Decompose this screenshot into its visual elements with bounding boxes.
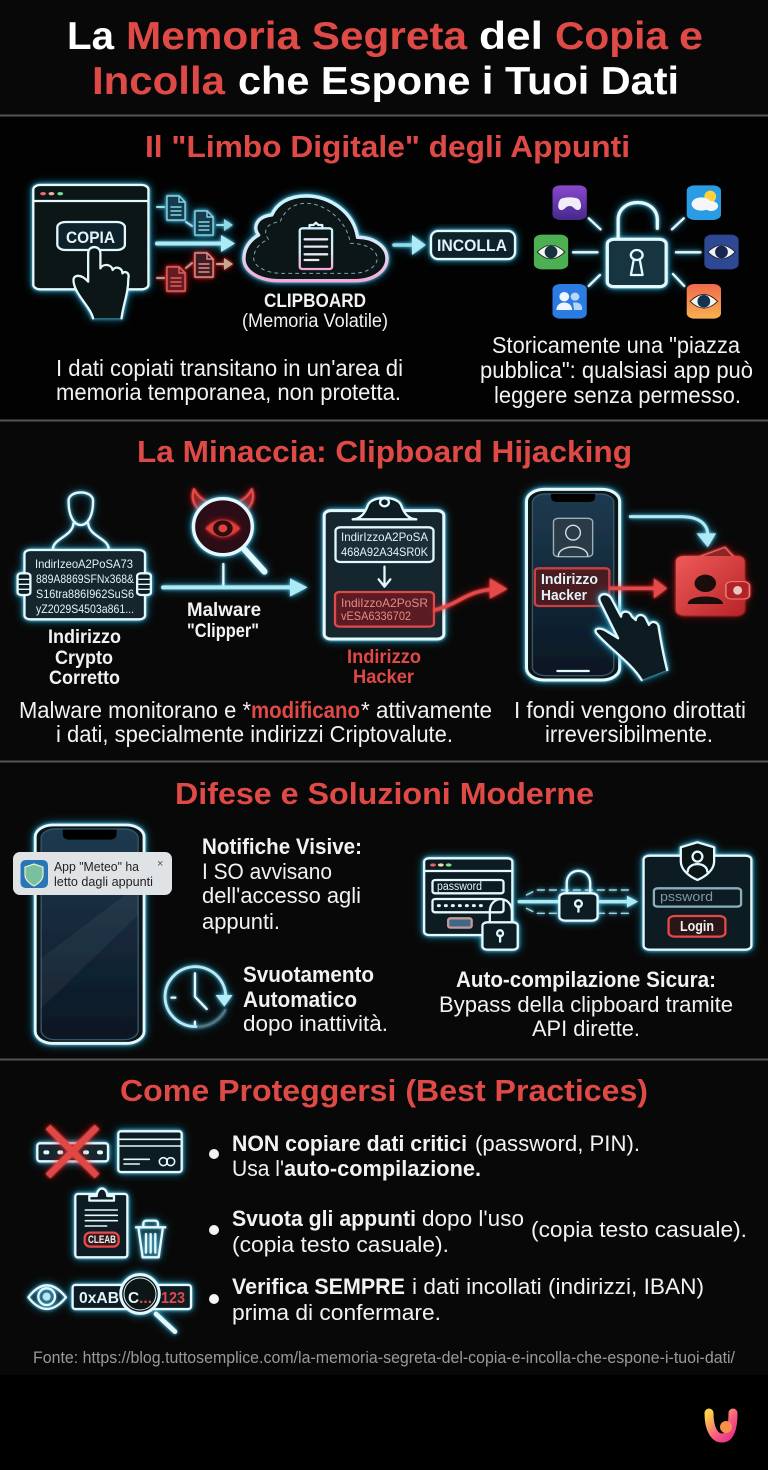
text: visual notifications: [202, 834, 362, 934]
label: correct address: Crypto: [55, 648, 113, 669]
icon: person holding address: yZ2029S4503a861...: [36, 602, 134, 616]
text: secure autofill: API dirette.: [532, 1016, 640, 1041]
source line: Fonte: https://blog.tuttosemplice.com/la-memoria-segreta-del-copia-e-incolla-che-espone-i-tuoi-dati/: [33, 1348, 735, 1367]
icon: copy window with hand: [33, 185, 148, 318]
arrow: phone to wallet cyan: [630, 517, 716, 547]
text: visual notifications: dell'accesso agli: [202, 883, 361, 908]
icon: padlock: [573, 202, 700, 287]
icon: phone with notification: [13, 825, 172, 1043]
text: automatic clearing: Svuotamento: [243, 962, 374, 987]
title: che Espone i Tuoi Dati: [238, 60, 679, 103]
title: e: [679, 15, 703, 58]
icon: phone: [35, 825, 144, 1043]
bullet: clear clipboard: (copia testo casuale).: [232, 1232, 449, 1257]
heading: difese: Difese e Soluzioni Moderne: [175, 776, 594, 811]
arrow: copy to clipboard: [157, 235, 235, 252]
text: temporary memory: I dati copiati transitano in un'area di: [56, 355, 403, 381]
icon: crossed password and card: [37, 1131, 182, 1172]
icon: copy window with hand: COPIA: [66, 228, 115, 247]
title: Memoria Segreta: [126, 15, 467, 58]
bullet: no critical data: Usa l': [232, 1156, 284, 1181]
icon: eye and magnified address: C...: [128, 1290, 152, 1307]
text: automatic clearing: dopo inattività.: [243, 1011, 388, 1036]
icon: tapping hand: [595, 594, 667, 680]
callout: notification: ×: [157, 858, 163, 870]
icon: phone with hacker address: Indirizzo: [541, 571, 598, 588]
icon: eye and magnified address: 123: [161, 1290, 185, 1307]
icon: red documents flowing: [157, 253, 233, 291]
icon: login panel: [644, 842, 751, 950]
icon: red cross: [48, 1127, 97, 1176]
panel: limbo digitale: [33, 129, 753, 408]
arrow: phone to wallet red: [611, 578, 667, 598]
label: incolla button: [431, 231, 515, 259]
text: visual notifications: appunti.: [202, 909, 280, 934]
label: malware clipper: [187, 600, 261, 642]
label: malware clipper: "Clipper": [187, 621, 259, 642]
bullet: always verify: Verifica SEMPRE: [232, 1274, 405, 1299]
label: clipboard: CLIPBOARD: [264, 291, 366, 312]
text: irreversible funds: irreversibilmente.: [545, 721, 713, 747]
text: automatic clearing: [243, 962, 388, 1036]
bullet: clear clipboard: [209, 1206, 747, 1257]
text: visual notifications: Notifiche Visive:: [202, 834, 362, 859]
icon: malware magnifier with horns: [193, 489, 264, 572]
callout: notification: letto dagli appunti: [54, 874, 153, 889]
heading: best practices: Come Proteggersi (Best Practices): [120, 1073, 648, 1108]
icon: clipboard swap: vESA6336702: [341, 609, 411, 623]
bullet: no critical data: NON copiare dati critici: [232, 1131, 467, 1156]
icon: hacker wallet: [676, 547, 749, 615]
icon: person holding address: [18, 492, 151, 619]
icon: phone with hacker address: Hacker: [541, 587, 587, 604]
label: correct address: Corretto: [49, 668, 120, 689]
panel: best practices: [28, 1073, 747, 1332]
title: [67, 15, 703, 103]
text: public square: leggere senza permesso.: [494, 382, 741, 408]
icon: horns: [193, 489, 253, 513]
text: irreversible funds: [514, 697, 746, 747]
heading: hijacking: La Minaccia: Clipboard Hijacking: [137, 434, 632, 469]
bullet: clear clipboard: Svuota gli appunti: [232, 1206, 416, 1231]
icon: red eye: [206, 520, 240, 537]
icon: password form and lock: [424, 858, 518, 950]
label: clipboard: [242, 291, 388, 332]
text: public square: Storicamente una "piazza: [492, 332, 741, 358]
icon: clock: [165, 967, 233, 1027]
text: secure autofill: [439, 967, 733, 1041]
callout: notification: App "Meteo" ha: [54, 859, 140, 874]
bullet: always verify: prima di confermare.: [232, 1300, 441, 1325]
text: malware description: * attivamente: [361, 697, 492, 723]
panel: clipboard hijacking: [18, 434, 749, 747]
text: temporary memory: [56, 355, 403, 405]
icon: person holding address: S16tra886I962SuS6: [36, 587, 134, 601]
text: secure autofill: Auto-compilazione Sicura:: [456, 967, 716, 992]
icon: magnifier: [193, 499, 264, 572]
bullet: clear clipboard: dopo l'uso: [422, 1206, 524, 1231]
icon: clipboard swap: 468A92A34SR0K: [341, 545, 428, 559]
label: incolla button: INCOLLA: [437, 236, 507, 255]
text: malware description: Malware monitorano e *: [19, 697, 251, 723]
icon: clipboard swap: IndiIzzoA2PoSR: [341, 596, 428, 610]
text: malware description: i dati, specialmente indirizzi Criptovalute.: [56, 721, 453, 747]
text: secure autofill: Bypass della clipboard tramite: [439, 992, 733, 1017]
callout: notification: [13, 852, 172, 895]
bullet: always verify: [209, 1274, 704, 1325]
text: public square: [480, 332, 753, 408]
title: del: [479, 15, 543, 58]
text: malware description: modificano: [251, 697, 360, 723]
icon: person holding address: 889A8869SFNx368&: [36, 572, 134, 586]
text: automatic clearing: Automatico: [243, 987, 357, 1012]
label: hacker address: Hacker: [353, 667, 415, 688]
bullet: clear clipboard: (copia testo casuale).: [531, 1217, 747, 1242]
icon: documents flowing: [157, 196, 233, 235]
title: Incolla: [92, 60, 225, 103]
arrow: clipboard to paste: [394, 235, 426, 255]
text: malware description: [19, 697, 492, 747]
icon: clipboard cloud: [244, 196, 387, 281]
text: temporary memory: memoria temporanea, non protetta.: [56, 379, 401, 405]
title: La: [67, 15, 114, 58]
title: Copia: [555, 15, 668, 58]
arrow: secure bypass lock: [519, 871, 638, 921]
icon: clipboard swap: IndirIzzoA2PoSA: [341, 530, 428, 544]
icon: eye and magnified address: 0xAB: [79, 1290, 119, 1307]
label: hacker address: Indirizzo: [347, 647, 421, 668]
icon: login panel: pssword: [660, 889, 713, 904]
icon: open padlock with apps: [534, 185, 739, 319]
icon: logo: [709, 1413, 733, 1438]
icon: clipboard clear and trash: [75, 1188, 165, 1257]
label: correct address: [48, 627, 121, 689]
label: malware clipper: Malware: [187, 600, 261, 621]
bullet: no critical data: (password, PIN).: [475, 1131, 640, 1156]
arrow: red to phone: [435, 578, 507, 610]
bullet: no critical data: [209, 1131, 640, 1181]
text: public square: pubblica": qualsiasi app può: [480, 357, 753, 383]
label: clipboard: (Memoria Volatile): [242, 311, 388, 332]
icon: clipboard swap: [324, 498, 444, 639]
panel: difese: [13, 776, 751, 1043]
icon: login panel: Login: [680, 918, 714, 935]
label: hacker address: [347, 647, 421, 688]
label: correct address: Indirizzo: [48, 627, 121, 648]
icon: clipboard clear and trash: CLEAB: [88, 1234, 116, 1246]
icon: password form and lock: password: [437, 881, 482, 893]
icon: person holding address: IndirIzeoA2PoSA73: [35, 557, 133, 571]
icon: app icons: [534, 185, 739, 319]
icon: phone with hacker address: [527, 489, 620, 680]
icon: eye and magnified address: [28, 1275, 191, 1332]
heading: limbo digitale: Il "Limbo Digitale" degli Appunti: [145, 129, 630, 164]
bullet: no critical data: auto-compilazione.: [284, 1156, 481, 1181]
text: irreversible funds: I fondi vengono dirottati: [514, 697, 746, 723]
bullet: always verify: i dati incollati (indirizzi, IBAN): [412, 1274, 704, 1299]
arrow: malware flow: [163, 564, 308, 597]
text: visual notifications: I SO avvisano: [202, 859, 332, 884]
